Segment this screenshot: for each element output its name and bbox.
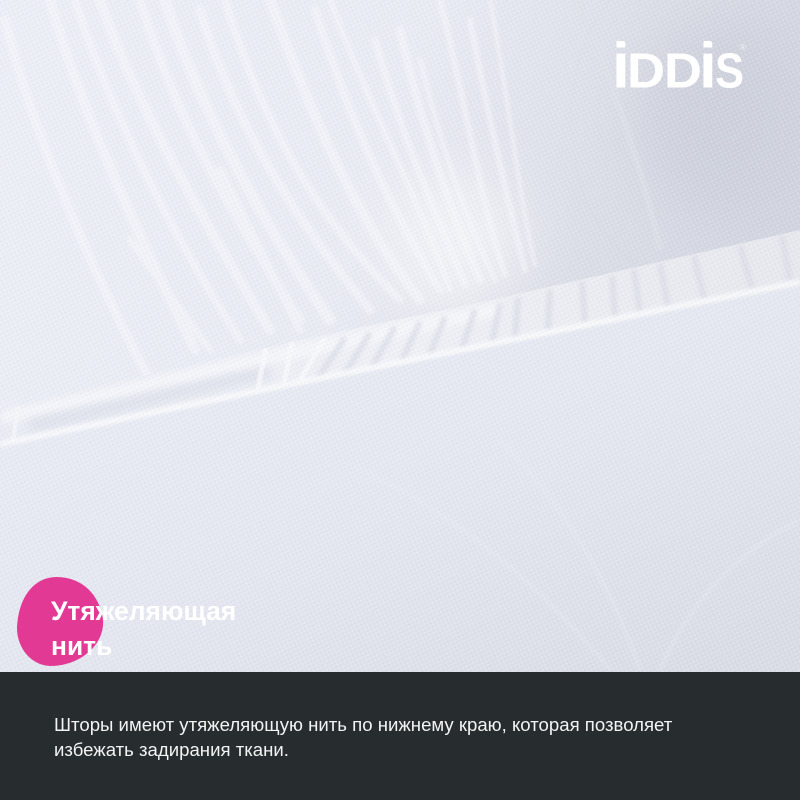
- hem highlight and shadow: [0, 309, 500, 418]
- caption text: Шторы имеют утяжеляющую нить по нижнему краю, которая позволяет: [54, 714, 672, 735]
- lower fabric faint fronds: [340, 440, 800, 670]
- hem stripes: [318, 236, 790, 378]
- logo: iDDiS: [616, 41, 746, 98]
- logo: iDDiS: S: [715, 44, 744, 98]
- pink blob: [17, 577, 104, 666]
- caption text: [54, 714, 672, 760]
- heading: Утяжеляющая: [51, 596, 236, 626]
- logo: iDDiS: i: [699, 30, 717, 102]
- dark caption bar: [0, 672, 800, 800]
- heading: нить: [51, 631, 112, 661]
- logo: iDDiS: D: [664, 44, 702, 98]
- logo: iDDiS: D: [627, 44, 665, 98]
- heading: [51, 596, 236, 661]
- logo: iDDiS: i: [612, 30, 630, 102]
- caption text: избежать задирания ткани.: [54, 739, 289, 760]
- stitched seam: [0, 282, 800, 444]
- lower fabric panel: [0, 285, 800, 672]
- logo: iDDiS: ®: [740, 43, 746, 52]
- weighted hem band: [0, 230, 800, 447]
